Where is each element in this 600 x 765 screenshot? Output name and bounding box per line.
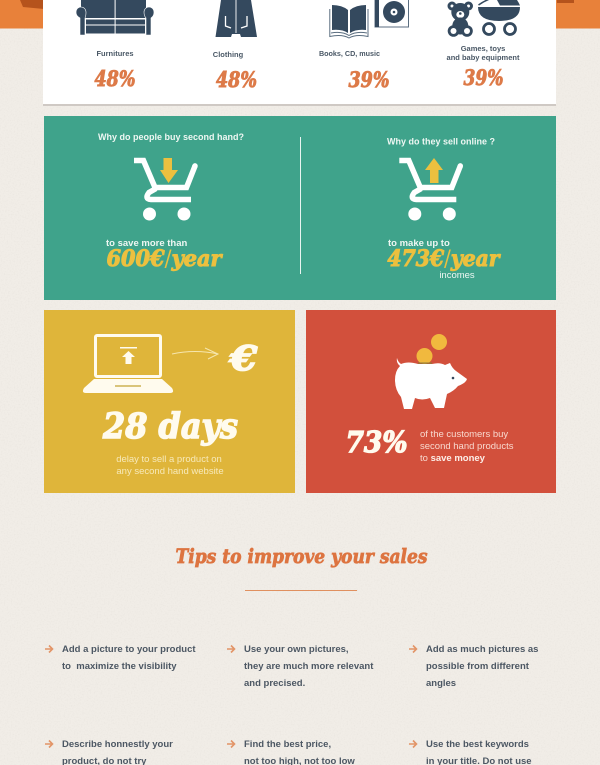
stat: 600 per year: 600€/year xyxy=(106,246,223,272)
text: delay: delay to sell a product on xyxy=(116,454,222,465)
tip: best price: Find the best price, xyxy=(244,739,331,750)
stat: clothing: 48% xyxy=(216,67,257,92)
icon: cart with up arrow xyxy=(399,158,460,220)
heading: tips: Tips to improve your sales xyxy=(176,544,428,568)
tip: add a picture: Add a picture to your product xyxy=(62,644,196,655)
arrow to euro xyxy=(172,348,218,359)
tip: best keywords: Use the best keywords xyxy=(426,739,529,750)
icon: stroller xyxy=(478,0,520,34)
icon: CD case xyxy=(375,0,408,27)
tip: as much pictures: Add as much pictures as xyxy=(426,644,538,655)
tip: add a picture xyxy=(45,644,196,672)
text: delay: any second hand website xyxy=(116,466,224,477)
label: books: Books, CD, music xyxy=(319,49,380,58)
label: furnitures: Furnitures xyxy=(96,49,134,58)
tip: describe honestly xyxy=(45,739,173,765)
orange banner remnants xyxy=(0,0,600,28)
stat: 28 days: 28 days xyxy=(102,406,238,447)
tip: add a picture: to maximize the visibility xyxy=(62,661,177,672)
icon: piggy bank and coins xyxy=(395,334,467,409)
icon: euro: € xyxy=(229,339,257,379)
text: customers: save money xyxy=(431,453,486,464)
text: customers: of the customers buy xyxy=(420,429,508,440)
panel: 73 percent xyxy=(306,310,556,493)
stat: 473 per year: 473€/year xyxy=(388,246,501,272)
tip: best price xyxy=(227,739,355,765)
label: clothing: Clothing xyxy=(213,50,244,59)
tip: best keywords xyxy=(409,739,532,765)
tip: own pictures xyxy=(227,644,374,689)
stat: games: 39% xyxy=(464,65,504,90)
heading: why sell: Why do they sell online ? xyxy=(387,136,495,146)
text: save more: to save more than xyxy=(106,238,187,249)
panel: purchased categories xyxy=(43,0,556,106)
label: games: Games, toys xyxy=(461,44,505,53)
icon: sofa xyxy=(76,0,154,35)
tip: as much pictures: possible from different xyxy=(426,661,530,672)
icon: cart with down arrow xyxy=(134,158,195,220)
panel: why buy and sell xyxy=(44,116,556,300)
tip: own pictures: Use your own pictures, xyxy=(244,644,349,655)
text: customers: second hand products xyxy=(420,441,514,452)
panel: 28 days xyxy=(44,310,295,493)
tip: own pictures: and precised. xyxy=(244,678,305,689)
text: customers: to xyxy=(420,453,431,464)
stat: books: 39% xyxy=(348,67,390,92)
stat: furnitures: 48% xyxy=(94,66,136,91)
tip: own pictures: they are much more relevant xyxy=(244,661,374,672)
label: games: and baby equipment xyxy=(447,53,520,62)
tip: as much pictures xyxy=(409,644,538,689)
tip: as much pictures: angles xyxy=(426,678,456,689)
stat: 73 percent: 73% xyxy=(346,425,408,459)
icon: laptop xyxy=(83,336,173,393)
heading: why buy: Why do people buy second hand? xyxy=(98,132,244,142)
icon: teddy bear xyxy=(448,2,473,37)
icon: book xyxy=(330,5,368,38)
text: incomes: incomes xyxy=(439,270,475,281)
icon: coat xyxy=(216,0,257,37)
tip: describe honestly: Describe honnestly your xyxy=(62,739,173,750)
text: make up to: to make up to xyxy=(388,238,450,249)
